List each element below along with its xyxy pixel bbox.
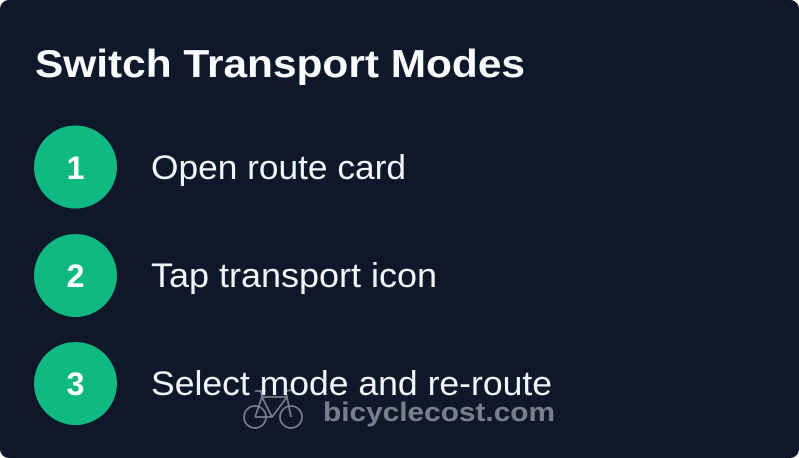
step 1 label: Open route card (151, 149, 406, 187)
step 1 badge (34, 126, 117, 208)
step 2 number: 2 (67, 258, 84, 294)
step 3 badge (34, 342, 117, 425)
watermark text: bicyclecost.com (323, 397, 555, 427)
step 2 label: Tap transport icon (151, 257, 437, 295)
step 1 (34, 126, 406, 208)
title: Switch Transport Modes (35, 43, 525, 86)
step 2 badge (34, 234, 117, 317)
step 2 (34, 234, 437, 317)
step 3 number: 3 (67, 366, 84, 402)
step 3 label: Select mode and re-route (151, 365, 552, 403)
step 3 (34, 342, 552, 425)
watermark (244, 390, 555, 428)
step 1 number: 1 (67, 150, 84, 186)
icon: bicycle (244, 390, 302, 428)
